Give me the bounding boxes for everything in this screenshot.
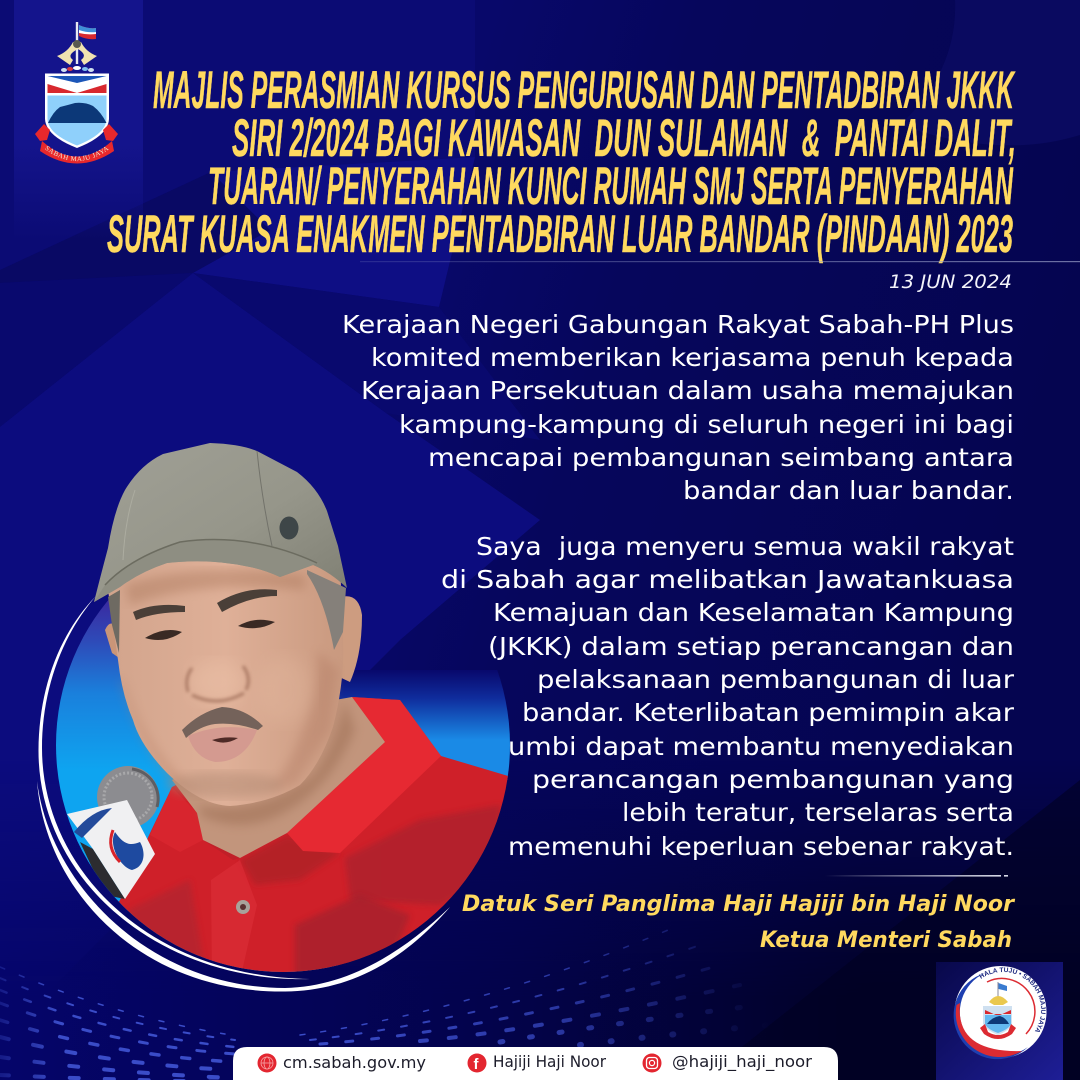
paragraph 2: perancangan pembangunan yang [532, 765, 1014, 794]
moustache [182, 707, 263, 738]
contact bar [233, 1047, 838, 1080]
photo disc [56, 600, 510, 972]
paragraph 1: mencapai pembangunan seimbang antara [428, 443, 1014, 472]
paragraph 2: memenuhi keperluan sebenar rakyat. [508, 832, 1014, 861]
bottom-right round logo [954, 966, 1046, 1060]
paragraph 2: (JKKK) dalam setiap perancangan dan [488, 632, 1014, 661]
paragraph 2: lebih teratur, terselaras serta [622, 798, 1014, 827]
shirt [118, 697, 508, 972]
paragraph 2: umbi dapat membantu menyediakan [508, 732, 1014, 761]
face [108, 560, 343, 806]
signatory name and role [462, 891, 1016, 953]
paragraph 1 [342, 310, 1014, 505]
motto ribbon: SABAH MAJU JAYA [45, 146, 109, 162]
head [105, 560, 362, 806]
microphone [67, 766, 159, 899]
nose [187, 666, 248, 701]
motto ribbon [35, 124, 118, 164]
website: cm.sabah.gov.my [283, 1053, 426, 1072]
cap button [280, 516, 298, 540]
title [107, 61, 1016, 264]
state crest logo [35, 22, 118, 164]
cap [94, 443, 347, 602]
paragraph 2: bandar. Keterlibatan pemimpin akar [522, 698, 1015, 727]
dotted wave pattern [0, 925, 770, 1080]
paragraph 1: Kerajaan Negeri Gabungan Rakyat Sabah-PH Plus [342, 310, 1014, 339]
right ear [333, 596, 362, 682]
paragraph 2 [441, 532, 1015, 861]
hair [307, 570, 346, 650]
portrait in circle [37, 443, 520, 992]
face shading [270, 650, 338, 790]
paragraph 2: pelaksanaan pembangunan di luar [537, 665, 1015, 694]
paragraph 2: Kemajuan dan Keselamatan Kampung [493, 598, 1014, 627]
paragraph 1: bandar dan luar bandar. [683, 476, 1014, 505]
paragraph 1: kampung-kampung di seluruh negeri ini bagi [399, 410, 1014, 439]
signatory name and role: Datuk Seri Panglima Haji Hajiji bin Haji Noor [462, 891, 1016, 917]
paragraph 1: komited memberikan kerjasama penuh kepada [371, 343, 1014, 372]
paragraph 1: Kerajaan Persekutuan dalam usaha memajukan [361, 376, 1014, 405]
flag [76, 22, 96, 64]
logo motto: HALA TUJU • SABAH MAJU JAYA [978, 967, 1046, 1032]
paragraph 2: Saya juga menyeru semua wakil rakyat [476, 532, 1014, 561]
paragraph 2: di Sabah agar melibatkan Jawatankuasa [441, 565, 1014, 594]
instagram: @hajiji_haji_noor [672, 1052, 812, 1072]
mouth [188, 727, 257, 762]
small crest [980, 982, 1016, 1039]
hands [57, 42, 97, 65]
eyebrows [133, 605, 185, 620]
wreath beads [61, 66, 94, 72]
facebook: Hajiji Haji Noor [493, 1052, 606, 1071]
shield [45, 74, 109, 148]
date: 13 JUN 2024 [889, 271, 1012, 293]
decorative rings [37, 596, 450, 992]
facebook: f [474, 1056, 480, 1073]
signatory name and role: Ketua Menteri Sabah [760, 927, 1012, 953]
neck [172, 697, 385, 858]
eyes [145, 630, 182, 640]
